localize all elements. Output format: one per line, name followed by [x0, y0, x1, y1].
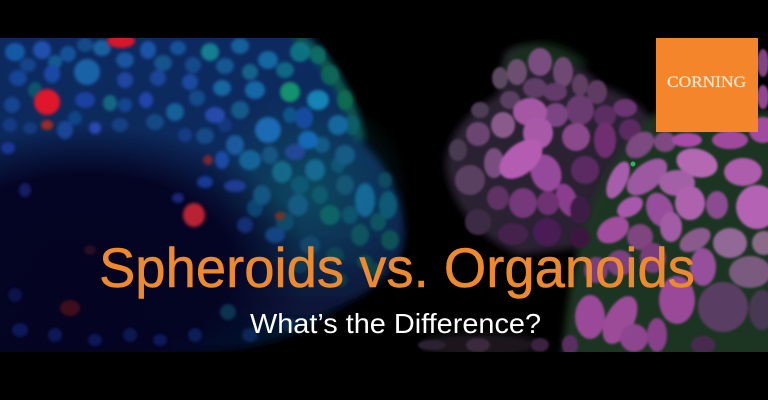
- right lobe: [625, 157, 669, 197]
- spheroid: blue cell cluster: [0, 38, 409, 352]
- logo wordmark: CORNING: [667, 74, 746, 91]
- dim filler cells: [20, 58, 36, 72]
- infographic banner: [0, 38, 768, 352]
- red stained cells: [34, 34, 285, 316]
- microscopy photo: [0, 38, 768, 352]
- bright cells: [5, 43, 25, 61]
- organoids: magenta nuclei clusters: [418, 42, 768, 360]
- left lobe: [492, 67, 508, 89]
- subtitle: What’s the Difference?: [250, 308, 541, 339]
- title: Spheroids vs. Organoids: [99, 236, 695, 299]
- logo: Corning orange square: [656, 38, 758, 132]
